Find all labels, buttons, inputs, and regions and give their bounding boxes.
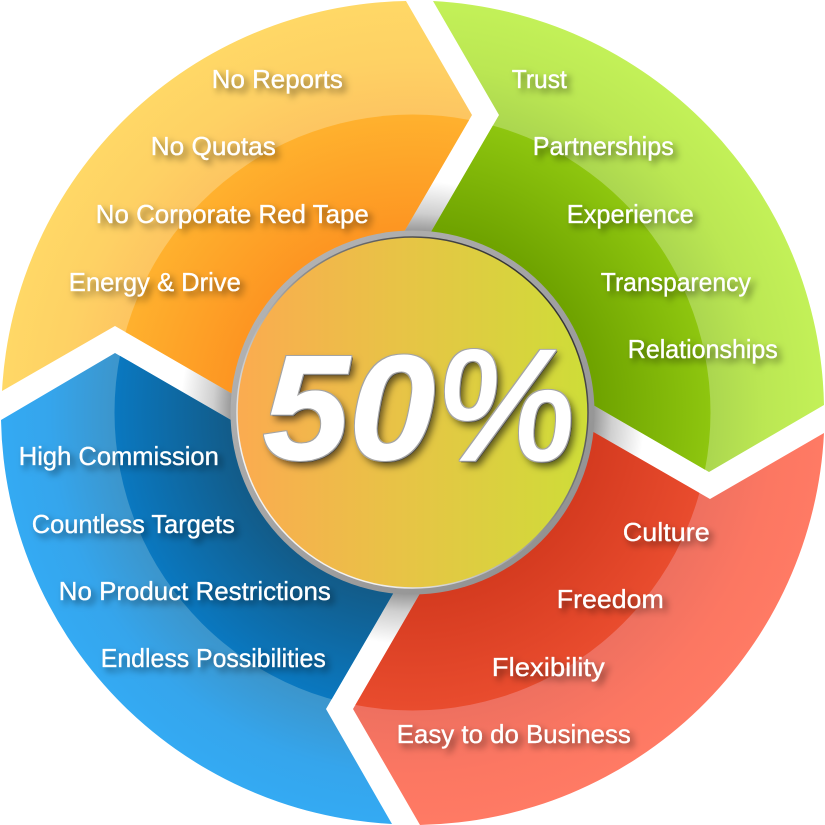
orange segment text: No Reports — [212, 64, 343, 94]
center shadow behind the segments — [180, 180, 644, 644]
green segment text: Trust — [512, 64, 568, 94]
green segment text: Relationships — [628, 334, 778, 364]
center badge — [230, 230, 594, 594]
green segment text: Partnerships — [533, 131, 674, 161]
red segment text: Flexibility — [492, 652, 605, 682]
blue segment text: Countless Targets — [32, 509, 235, 539]
heading: 50%: 50 — [263, 324, 435, 491]
red segment text: Freedom — [557, 584, 664, 614]
blue segment text: High Commission — [19, 441, 219, 471]
red segment text — [397, 517, 710, 749]
panel: green segment — [431, 1, 824, 472]
green segment text — [512, 64, 778, 364]
orange segment text: Energy & Drive — [69, 267, 241, 297]
orange segment text — [69, 64, 369, 297]
heading: 50%: % — [432, 319, 583, 493]
heading: 50% — [263, 319, 583, 493]
green segment text: Transparency — [601, 267, 751, 297]
blue segment text — [19, 441, 331, 673]
orange segment text: No Quotas — [151, 131, 276, 161]
panel: red segment — [353, 432, 824, 825]
blue segment text: Endless Possibilities — [101, 643, 326, 673]
green segment text: Experience — [567, 199, 694, 229]
panel: blue segment — [1, 353, 394, 824]
blue segment text: No Product Restrictions — [59, 576, 331, 606]
panel: orange segment — [2, 1, 472, 394]
red segment text: Easy to do Business — [397, 719, 631, 749]
red segment text: Culture — [623, 517, 710, 547]
orange segment text: No Corporate Red Tape — [96, 199, 369, 229]
